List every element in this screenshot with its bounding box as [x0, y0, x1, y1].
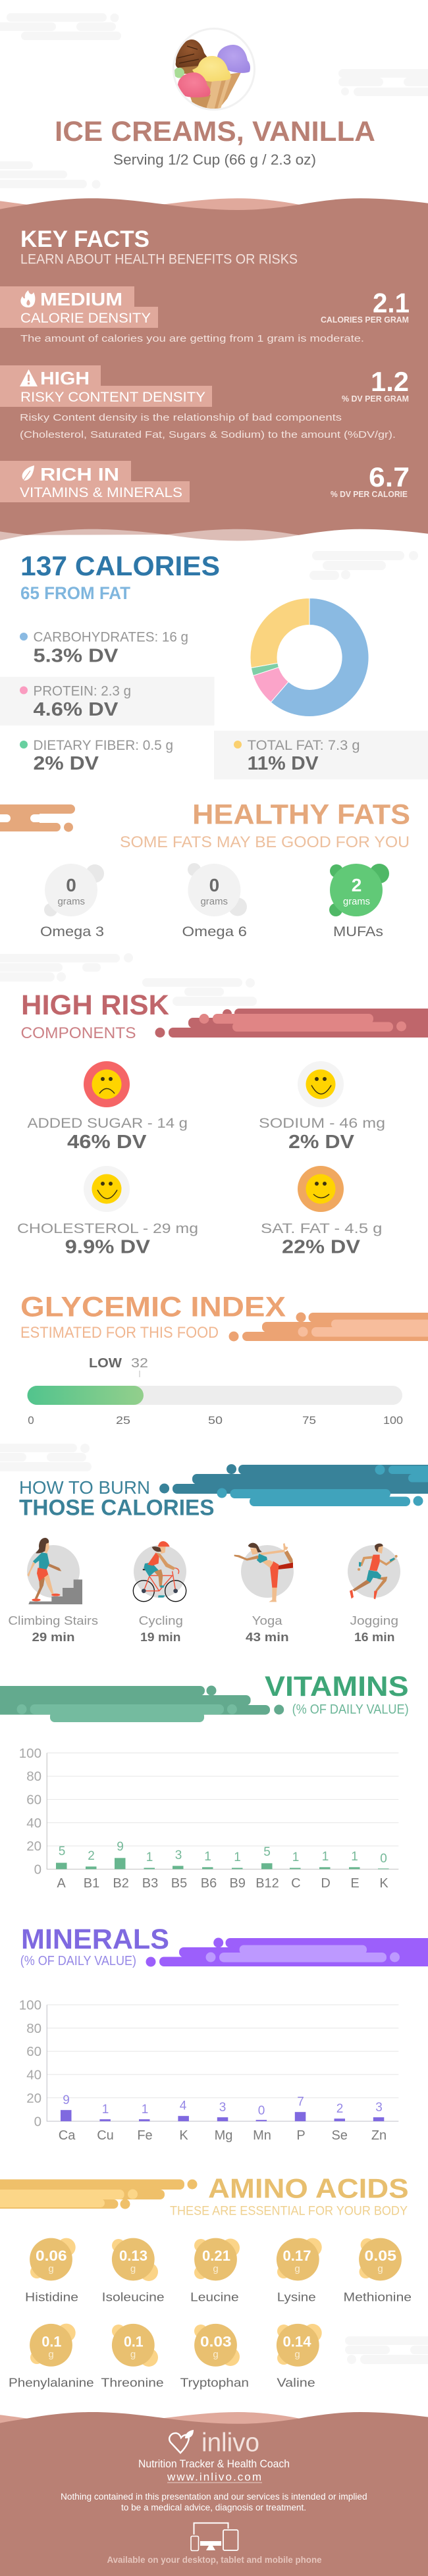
badge: MUFAs: MUFAs: [333, 924, 383, 939]
heading line 2: THOSE CALORIES: [19, 1496, 215, 1521]
bar chart: minerals: 1: [102, 2103, 109, 2116]
badge: threonine: [101, 2324, 164, 2390]
legend: protein: 4.6% DV: [33, 699, 119, 720]
bar chart: minerals: 4: [180, 2099, 187, 2113]
bar chart: minerals: 60: [26, 2044, 41, 2059]
subheading: LEARN ABOUT HEALTH BENEFITS OR RISKS: [20, 251, 298, 267]
bar chart: minerals: Zn: [371, 2128, 387, 2143]
website link: www.inlivo.com: [167, 2471, 261, 2483]
description: Risky Content density is the relationship of bad components: [20, 412, 342, 423]
activity: jogging: 16 min: [354, 1631, 395, 1644]
badge: phenylalanine: g: [48, 2349, 54, 2360]
donut chart: [250, 598, 369, 716]
bar chart: vitamins: 1: [146, 1851, 153, 1864]
badge: omega 6: 0: [209, 875, 219, 895]
bar chart: minerals: Mg: [215, 2128, 232, 2143]
badge: lysine: g: [294, 2263, 300, 2274]
badge: omega 3: grams: [58, 896, 85, 907]
bar chart: vitamins: 40: [26, 1816, 41, 1831]
subheading: ESTIMATED FOR THIS FOOD: [20, 1324, 219, 1342]
gauge: glycemic index bar: 50: [208, 1414, 223, 1427]
bar chart: minerals: 3: [219, 2101, 226, 2115]
bar chart: vitamins: 1: [234, 1851, 241, 1864]
item: cholesterol: 9.9% DV: [65, 1237, 151, 1258]
disclaimer: [61, 2492, 367, 2513]
availability note: Available on your desktop, tablet and mobile phone: [107, 2555, 322, 2565]
bar chart: vitamins: 100: [19, 1746, 41, 1761]
legend: protein: [0, 677, 215, 725]
legend: dietary fiber: 2% DV: [33, 753, 99, 774]
badge: methionine: Methionine: [344, 2291, 412, 2304]
bar chart: vitamins: 9: [117, 1840, 124, 1854]
bar chart: minerals: 9: [63, 2093, 70, 2107]
badge: threonine: g: [130, 2349, 136, 2360]
gauge: glycemic index bar: 25: [116, 1414, 130, 1427]
activity: yoga: [234, 1543, 294, 1644]
activity: climbing stairs: Climbing Stairs: [8, 1614, 98, 1627]
badge: valine: g: [294, 2349, 300, 2360]
legend: protein: PROTEIN: 2.3 g: [33, 684, 131, 699]
label: rich in: RICH IN: [40, 464, 119, 485]
legend: total fat: 11% DV: [248, 753, 319, 774]
bar chart: vitamins: E: [350, 1876, 360, 1891]
item: cholesterol: CHOLESTEROL - 29 mg: [17, 1221, 198, 1236]
decorative bars: [229, 1313, 428, 1342]
bar chart: vitamins: 20: [26, 1839, 41, 1854]
icon: flame: [20, 290, 35, 307]
badge: phenylalanine: Phenylalanine: [9, 2377, 94, 2390]
activity: climbing stairs: 29 min: [32, 1631, 75, 1644]
decorative bars: [0, 1685, 284, 1722]
decorative bars: [155, 1009, 428, 1038]
decorative bars: [0, 2179, 198, 2209]
panel: glycemic index: [20, 1292, 428, 1427]
bar chart: minerals: 100: [19, 1997, 41, 2013]
decorative bars: [0, 804, 75, 832]
fact: rich in vitamins and minerals: [0, 461, 410, 502]
description line 2: (Cholesterol, Saturated Fat, Sugars & Sodium) to the amount (%DV/gr).: [20, 429, 396, 440]
activity: climbing stairs: [8, 1538, 98, 1644]
heading: high risk: HIGH RISK: [21, 990, 169, 1021]
badge: leucine: [190, 2238, 240, 2304]
subheading: THESE ARE ESSENTIAL FOR YOUR BODY: [170, 2205, 408, 2219]
legend: carbohydrates: [20, 629, 188, 667]
item: added sugar: ADDED SUGAR - 14 g: [28, 1116, 188, 1131]
badge: omega 3: [40, 864, 104, 939]
badge: phenylalanine: [9, 2324, 94, 2390]
badge: histidine: g: [48, 2263, 54, 2274]
item: sodium: SODIUM - 46 mg: [259, 1116, 385, 1131]
bar chart: minerals: K: [179, 2128, 188, 2143]
bar chart: vitamins: 0: [380, 1852, 387, 1866]
tagline: Nutrition Tracker & Health Coach: [138, 2458, 290, 2470]
header: [55, 29, 375, 168]
icon: leaf: [22, 465, 34, 481]
subheading: components: COMPONENTS: [21, 1024, 136, 1042]
bar chart: minerals: 20: [26, 2091, 41, 2106]
subheading: (% OF DAILY VALUE): [292, 1702, 409, 1717]
heading line 1: HOW TO BURN: [19, 1477, 150, 1498]
heading: amino acids: AMINO ACIDS: [208, 2173, 409, 2204]
heading: 137 calories: 137 CALORIES: [20, 550, 220, 581]
value: 6.7: 6.7: [369, 461, 410, 492]
panel: amino acids: [0, 2173, 412, 2390]
legend: total fat: [214, 731, 428, 779]
badge: leucine: g: [213, 2263, 219, 2274]
bar chart: minerals: 80: [26, 2021, 41, 2036]
badge: valine: Valine: [277, 2377, 315, 2390]
badge: lysine: Lysine: [277, 2291, 316, 2304]
bar chart: vitamins: B1: [84, 1876, 99, 1891]
bar chart: vitamins: 3: [175, 1849, 182, 1862]
badge: histidine: [25, 2238, 78, 2304]
bar chart: minerals: [19, 1997, 398, 2143]
badge: isoleucine: g: [130, 2263, 136, 2274]
heading: glycemic index: GLYCEMIC INDEX: [20, 1292, 286, 1323]
badge: tryptophan: g: [213, 2349, 219, 2360]
legend: total fat: TOTAL FAT: 7.3 g: [248, 738, 360, 753]
badge: threonine: Threonine: [101, 2377, 164, 2390]
badge: histidine: Histidine: [25, 2291, 78, 2304]
fact: risky content density: [0, 365, 409, 440]
bar chart: vitamins: B2: [113, 1876, 129, 1891]
panel: high risk components: [17, 990, 428, 1258]
bar chart: vitamins: A: [57, 1876, 66, 1891]
subheading: SOME FATS MAY BE GOOD FOR YOU: [120, 833, 410, 851]
label: medium: MEDIUM: [40, 289, 122, 309]
bar chart: vitamins: 2: [88, 1849, 95, 1863]
activity: jogging: [348, 1544, 400, 1644]
badge: methionine: g: [377, 2263, 383, 2274]
badge: omega 3: Omega 3: [40, 924, 104, 939]
badge: tryptophan: Tryptophan: [180, 2377, 249, 2390]
bar chart: vitamins: B9: [229, 1876, 246, 1891]
badge: methionine: [344, 2238, 412, 2304]
icon: ice cream scoops: [174, 29, 254, 111]
legend: dietary fiber: [20, 738, 173, 774]
bar chart: minerals: P: [296, 2128, 306, 2143]
bar chart: minerals: 0: [34, 2115, 41, 2129]
bar chart: minerals: 1: [142, 2103, 148, 2116]
label: high: HIGH: [40, 368, 90, 388]
bar chart: vitamins: C: [291, 1876, 301, 1891]
panel: healthy fats: [0, 799, 410, 939]
badge: leucine: 0.21: [202, 2247, 230, 2264]
bar chart: minerals: Se: [331, 2128, 348, 2143]
subheading: 65 from fat: 65 FROM FAT: [20, 583, 130, 603]
badge: tryptophan: [180, 2324, 249, 2390]
badge: valine: 0.14: [283, 2333, 311, 2350]
bar chart: minerals: 2: [336, 2102, 343, 2116]
gauge: glycemic index bar: LOW: [89, 1356, 122, 1371]
panel: how to burn those calories: [8, 1464, 428, 1644]
unit: % DV PER CALORIE: [331, 490, 408, 499]
description: The amount of calories you are getting from 1 gram is moderate.: [20, 333, 364, 344]
heading: vitamins: VITAMINS: [265, 1671, 409, 1702]
bar chart: vitamins: B5: [171, 1876, 187, 1891]
bar chart: minerals: Cu: [97, 2128, 114, 2143]
bar chart: minerals: Ca: [59, 2128, 76, 2143]
logo: inlivo: [169, 2429, 259, 2458]
bar chart: minerals: 40: [26, 2067, 41, 2083]
bar chart: vitamins: 0: [34, 1862, 41, 1878]
activity: yoga: 43 min: [246, 1631, 289, 1644]
bar chart: vitamins: 1: [292, 1851, 299, 1864]
bar chart: vitamins: 80: [26, 1769, 41, 1784]
item: cholesterol: [17, 1166, 198, 1258]
item: added sugar: [28, 1061, 188, 1153]
value: 2.1: 2.1: [373, 287, 410, 319]
gauge: glycemic index bar: 75: [302, 1414, 316, 1427]
icon: devices: [191, 2523, 238, 2550]
panel: minerals: [19, 1924, 428, 2143]
badge: lysine: 0.17: [283, 2247, 311, 2264]
bar chart: minerals: 3: [375, 2101, 383, 2115]
badge: histidine: 0.06: [36, 2247, 67, 2264]
heading: minerals: MINERALS: [21, 1924, 169, 1955]
decorative bars: [146, 1938, 428, 1967]
panel: vitamins: [0, 1671, 409, 1891]
bar chart: vitamins: B3: [142, 1876, 158, 1891]
item: saturated fat: SAT. FAT - 4.5 g: [261, 1221, 382, 1236]
legend: carbohydrates: 5.3% DV: [33, 646, 119, 667]
badge: phenylalanine: 0.1: [41, 2333, 61, 2350]
bar chart: vitamins: K: [379, 1876, 388, 1891]
item: sodium: [259, 1061, 385, 1153]
badge: omega 6: [182, 863, 247, 939]
activity: cycling: 19 min: [140, 1631, 180, 1644]
logo: inlivo: inlivo: [201, 2429, 259, 2458]
disclaimer: Nothing contained in this presentation and our services is intended or implied: [61, 2492, 367, 2502]
item: added sugar: 46% DV: [67, 1132, 147, 1153]
footer: [0, 2412, 428, 2576]
badge: lysine: [277, 2238, 322, 2304]
bar chart: vitamins: 60: [26, 1792, 41, 1808]
unit: CALORIES PER GRAM: [321, 315, 409, 325]
badge: isoleucine: [102, 2238, 165, 2304]
badge: tryptophan: 0.03: [200, 2333, 232, 2350]
badge: MUFAs: grams: [343, 896, 370, 907]
gauge: glycemic index bar: 100: [383, 1414, 403, 1427]
bar chart: vitamins: [19, 1746, 398, 1891]
unit: % DV PER GRAM: [342, 394, 409, 404]
heading: key facts: KEY FACTS: [20, 226, 149, 252]
bar chart: minerals: Fe: [137, 2128, 153, 2143]
badge: isoleucine: Isoleucine: [102, 2291, 165, 2304]
badge: leucine: Leucine: [190, 2291, 239, 2304]
activity: yoga: Yoga: [252, 1614, 283, 1627]
bar chart: vitamins: B12: [255, 1876, 279, 1891]
heading: healthy fats: HEALTHY FATS: [192, 799, 410, 831]
item: saturated fat: 22% DV: [282, 1237, 361, 1258]
badge: methionine: 0.05: [365, 2247, 396, 2264]
bar chart: vitamins: 1: [322, 1850, 329, 1864]
label: risky content density: RISKY CONTENT DENSITY: [20, 390, 205, 405]
badge: valine: [277, 2324, 322, 2390]
serving size: Serving 1/2 Cup (66 g / 2.3 oz): [113, 151, 316, 168]
bar chart: vitamins: 1: [204, 1850, 211, 1864]
icon: warning triangle: [20, 369, 38, 386]
badge: MUFAs: [329, 864, 389, 939]
badge: isoleucine: 0.13: [119, 2247, 147, 2264]
bar chart: vitamins: 5: [59, 1845, 65, 1858]
activity: cycling: [133, 1541, 186, 1644]
panel: calories: [0, 550, 428, 779]
disclaimer: to be a medical advice, diagnosis or treatment.: [121, 2503, 306, 2513]
badge: MUFAs: 2: [352, 875, 361, 895]
badge: omega 3: 0: [66, 875, 76, 895]
label: calorie density: CALORIE DENSITY: [20, 311, 151, 326]
activity: cycling: Cycling: [139, 1614, 183, 1627]
bar chart: vitamins: 5: [263, 1845, 271, 1859]
item: saturated fat: [261, 1166, 382, 1258]
decorative bars: [159, 1464, 428, 1506]
bar chart: vitamins: B6: [201, 1876, 217, 1891]
legend: carbohydrates: CARBOHYDRATES: 16 g: [33, 629, 188, 645]
bar chart: vitamins: 1: [351, 1850, 358, 1864]
activity: jogging: Jogging: [350, 1614, 398, 1627]
bar chart: vitamins: D: [321, 1876, 331, 1891]
item: sodium: 2% DV: [288, 1132, 355, 1153]
bar chart: minerals: Mn: [253, 2128, 271, 2143]
label: vitamins and minerals: VITAMINS & MINERALS: [20, 485, 182, 500]
legend: dietary fiber: DIETARY FIBER: 0.5 g: [33, 738, 173, 753]
panel: key facts: [0, 198, 428, 541]
badge: omega 6: grams: [200, 896, 228, 907]
badge: threonine: 0.1: [124, 2333, 144, 2350]
bar chart: minerals: 0: [258, 2104, 265, 2118]
title: ICE CREAMS, VANILLA: [55, 116, 375, 147]
subheading: (% OF DAILY VALUE): [20, 1954, 136, 1968]
gauge: glycemic index bar: [28, 1356, 403, 1427]
fact: calorie density: [0, 286, 410, 344]
value: 1.2: 1.2: [371, 366, 409, 397]
badge: omega 6: Omega 6: [182, 924, 247, 939]
bar chart: minerals: 7: [297, 2095, 304, 2109]
gauge: glycemic index bar: 0: [28, 1414, 34, 1427]
gauge: glycemic index bar: 32: [131, 1356, 148, 1371]
